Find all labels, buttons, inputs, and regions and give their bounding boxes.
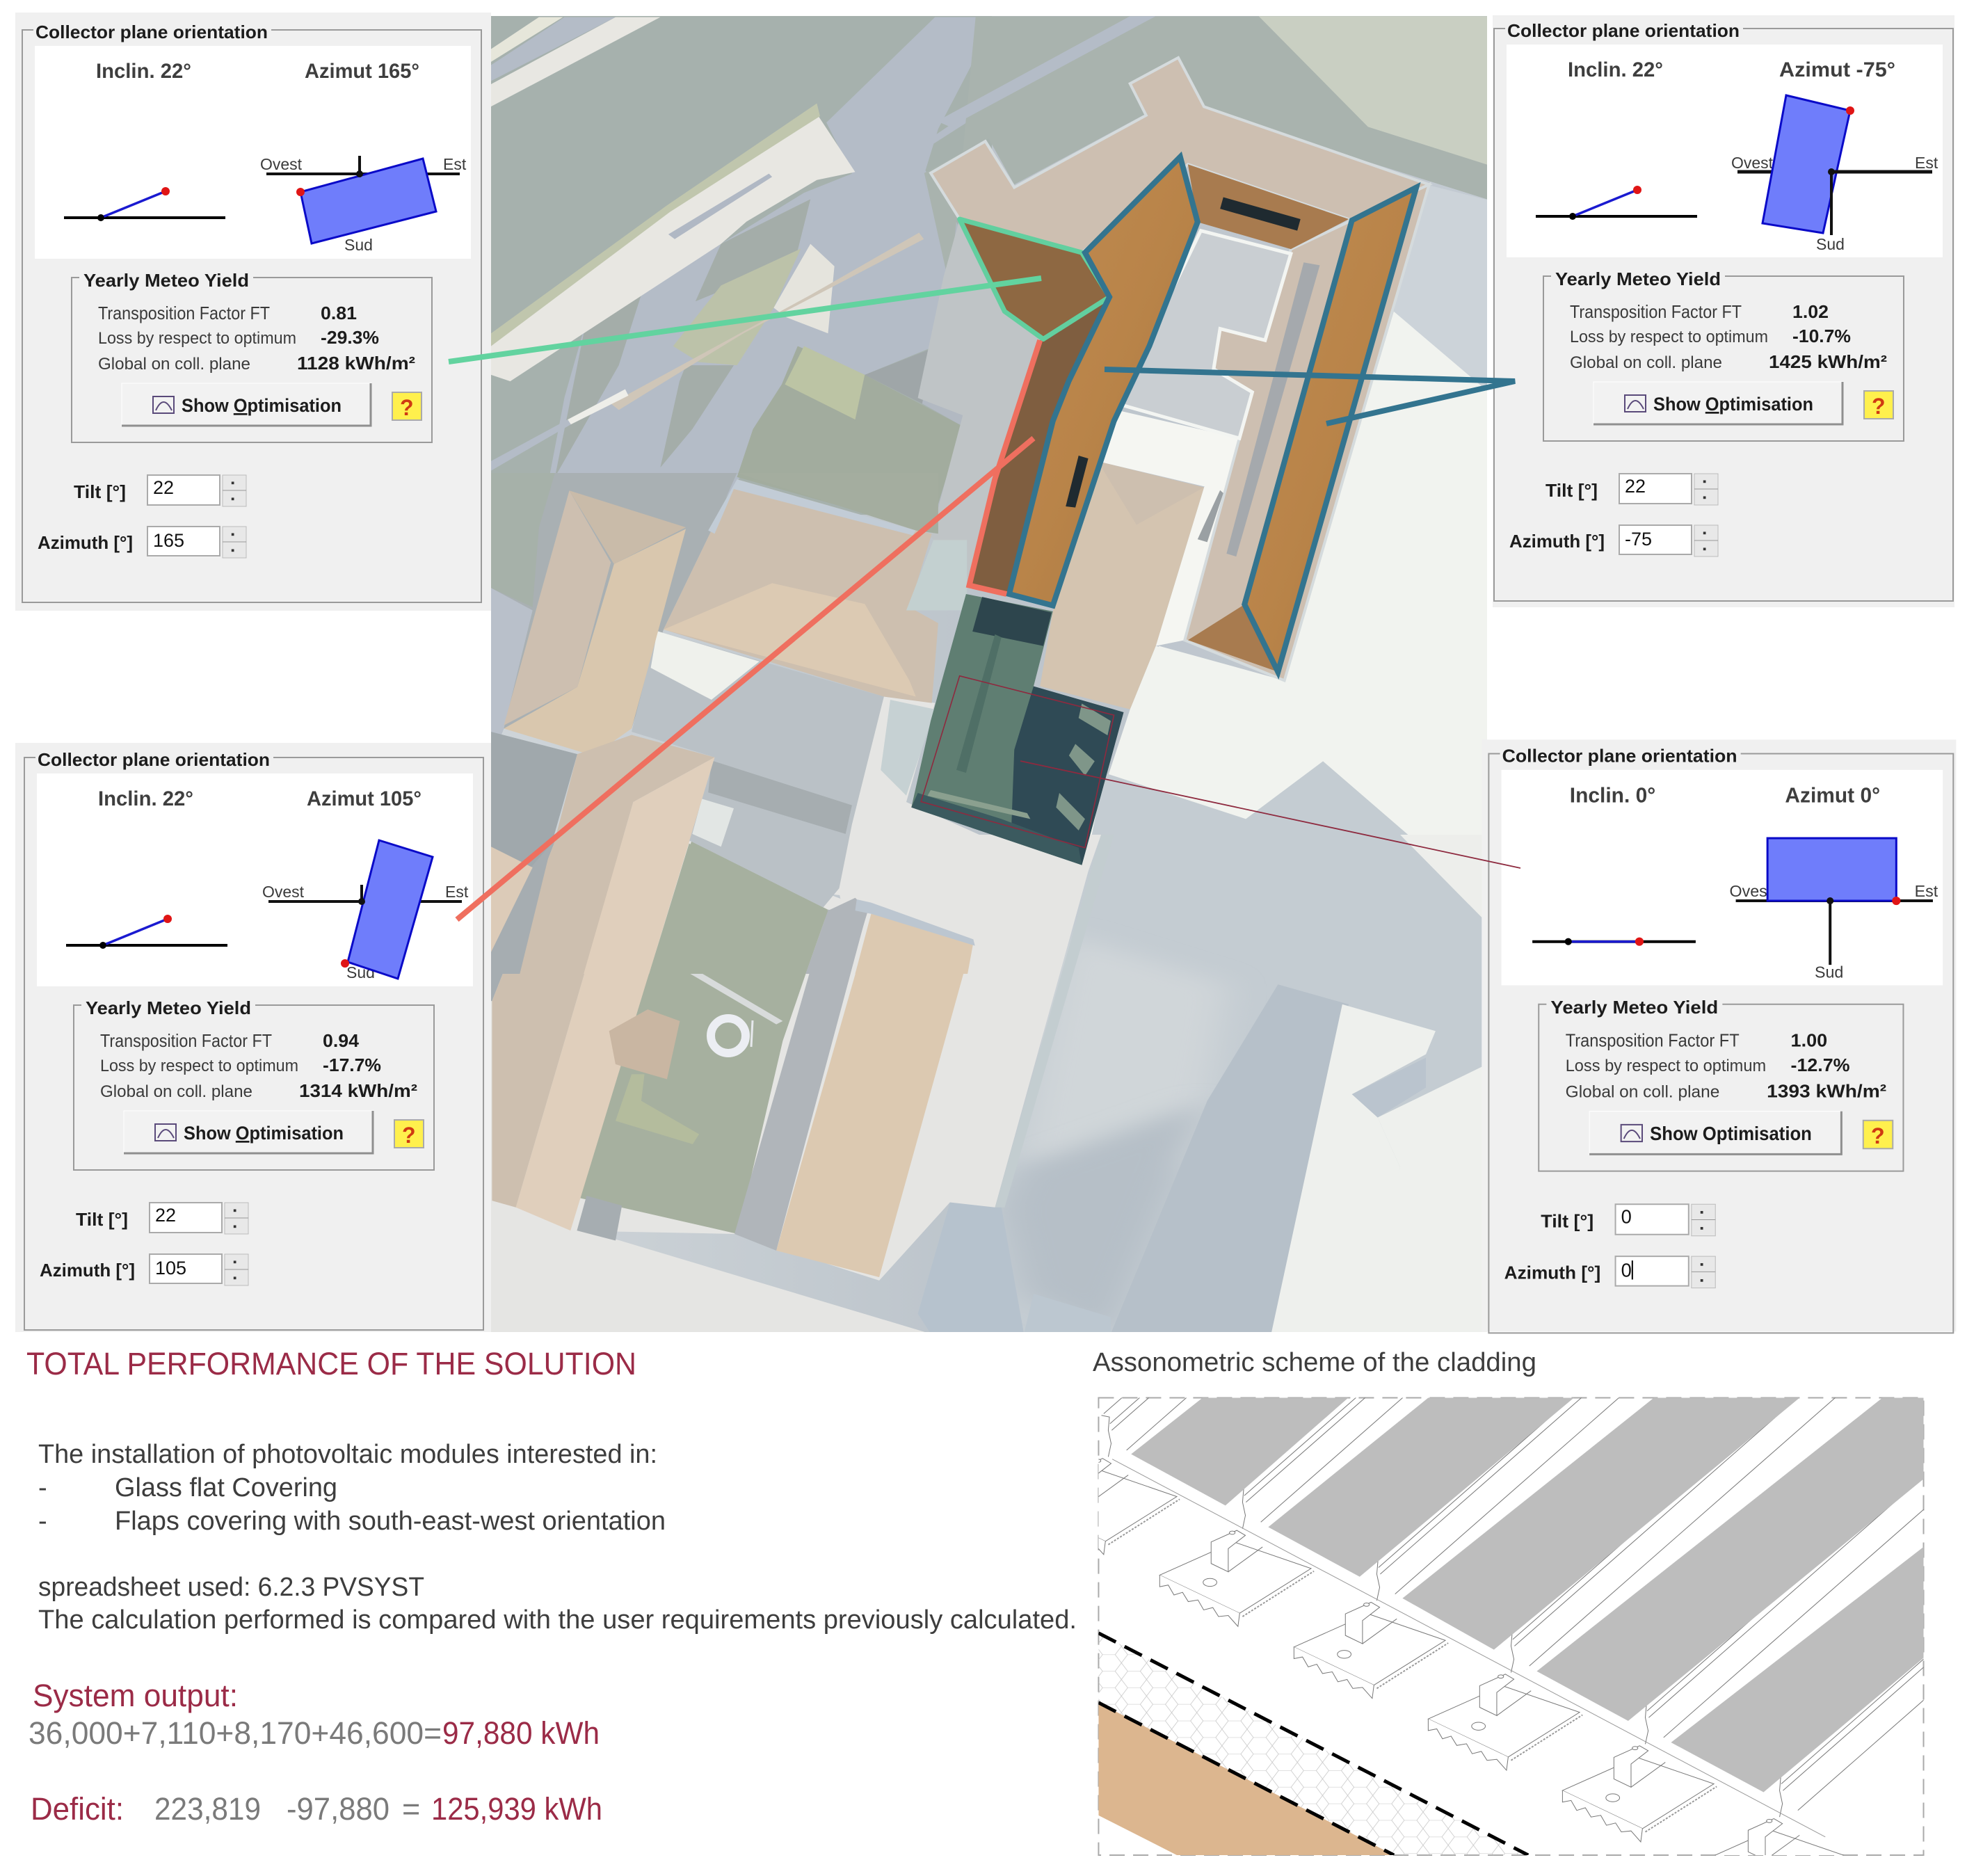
text block: deficit: = xyxy=(402,1791,420,1827)
panel: collector orientation 0 xyxy=(1482,739,1956,1333)
connector: red xyxy=(457,438,1034,920)
tilt input: 22 xyxy=(1625,476,1646,497)
red roof edge xyxy=(970,340,1040,594)
azimuth input: Azimuth [°] xyxy=(1509,531,1605,552)
tilt input: 0 xyxy=(1621,1206,1632,1228)
azimuth input: ▪ xyxy=(1700,1258,1703,1270)
text block: system output: 36,000+7,110+8,170+46,600= xyxy=(29,1715,442,1751)
tilt input xyxy=(74,475,246,506)
connector: thin dark red xyxy=(1020,761,1520,868)
azimuth diagram xyxy=(262,840,469,981)
axonometric cladding diagram xyxy=(1098,1397,1924,1856)
text block: installation description xyxy=(38,1440,1077,1635)
yearly meteo yield: 1.02 xyxy=(1792,301,1829,322)
connector: blue xyxy=(1105,369,1515,424)
text block: installation description: The calculation performed is compared with the user requirements previously calculated. xyxy=(38,1605,1077,1635)
yearly meteo yield: Yearly Meteo Yield xyxy=(86,997,251,1018)
yearly meteo yield: 0.81 xyxy=(321,303,357,323)
tilt input: ▪ xyxy=(1700,1223,1703,1235)
azimuth diagram: Est xyxy=(1915,154,1938,172)
azimuth input: Azimuth [°] xyxy=(40,1260,135,1281)
inclination label: Inclin. 22° xyxy=(96,60,191,83)
tilt input: 22 xyxy=(153,477,174,498)
heading: cladding scheme: Assonometric scheme of the cladding xyxy=(1093,1348,1536,1377)
azimuth label: Azimut 105° xyxy=(307,787,421,810)
connector: green xyxy=(449,278,1041,362)
azimuth label: Azimut 0° xyxy=(1785,784,1880,807)
text block: installation description: - xyxy=(38,1507,47,1536)
azimuth input xyxy=(38,527,246,558)
panel: green roof outline xyxy=(960,219,1109,339)
azimuth label: Azimut 165° xyxy=(305,60,419,83)
panel: collector orientation 165 xyxy=(15,13,491,611)
azimuth input: ▪ xyxy=(1703,543,1706,555)
yearly meteo yield: ? xyxy=(400,395,414,420)
yearly meteo yield: Transposition Factor FT xyxy=(1570,301,1742,322)
azimuth diagram: Sud xyxy=(1815,963,1843,981)
inclination label: Inclin. 0° xyxy=(1570,784,1655,807)
mounting supports xyxy=(1098,1398,1924,1855)
yearly meteo yield xyxy=(1539,997,1903,1171)
tilt input: Tilt [°] xyxy=(1546,480,1598,501)
azimuth input: Azimuth [°] xyxy=(38,532,133,553)
azimuth diagram: Ovest xyxy=(1731,154,1774,172)
text block: installation description: The installation of photovoltaic modules interested in: xyxy=(38,1440,657,1469)
heading: Collector plane orientation xyxy=(1507,20,1740,41)
yearly meteo yield: 1.00 xyxy=(1791,1030,1827,1051)
map: northwest streets and shadows xyxy=(491,14,992,515)
tilt diagram xyxy=(1536,186,1697,220)
yearly meteo yield: Yearly Meteo Yield xyxy=(83,270,249,291)
yearly meteo yield: ? xyxy=(1872,394,1886,419)
tilt input: ▪ xyxy=(233,1221,236,1233)
azimuth diagram: Ovest xyxy=(1729,882,1772,900)
text block: system output: 97,880 kWh xyxy=(442,1715,600,1751)
yearly meteo yield: Loss by respect to optimum xyxy=(1566,1057,1766,1075)
text block: installation description: spreadsheet used: 6.2.3 PVSYST xyxy=(38,1573,424,1602)
yearly meteo yield: 1425 kWh/m² xyxy=(1769,351,1887,372)
yearly meteo yield: ? xyxy=(402,1123,416,1148)
map: southern blocks xyxy=(487,835,1495,1333)
yearly meteo yield xyxy=(74,997,434,1170)
tilt input: ▪ xyxy=(1703,476,1706,488)
yearly meteo yield: ? xyxy=(1871,1123,1885,1148)
azimuth input xyxy=(1504,1256,1715,1288)
yearly meteo yield: Transposition Factor FT xyxy=(98,303,270,323)
text block: installation description: Glass flat Covering xyxy=(115,1473,337,1502)
yearly meteo yield: Global on coll. plane xyxy=(1566,1082,1719,1101)
azimuth input: 0 xyxy=(1621,1259,1632,1281)
yearly meteo yield: -17.7% xyxy=(323,1055,381,1075)
yearly meteo yield: Loss by respect to optimum xyxy=(100,1057,298,1075)
tilt input: ▪ xyxy=(1700,1206,1703,1218)
yearly meteo yield: Yearly Meteo Yield xyxy=(1550,997,1718,1018)
azimuth input: Azimuth [°] xyxy=(1504,1262,1600,1283)
text block: system output: System output: xyxy=(33,1678,238,1713)
tilt input: Tilt [°] xyxy=(1541,1211,1593,1232)
azimuth input: ▪ xyxy=(231,545,234,556)
photovoltaic panels xyxy=(1131,1398,1924,1792)
text block: installation description: Flaps covering with south-east-west orientation xyxy=(115,1507,666,1536)
tilt input xyxy=(1541,1204,1715,1236)
tilt diagram xyxy=(66,915,227,949)
panel: blue right roof outline xyxy=(1244,187,1416,672)
heading: Collector plane orientation xyxy=(1502,746,1737,767)
tilt diagram xyxy=(64,187,225,221)
glass flat covering xyxy=(911,594,1123,865)
yearly meteo yield: Global on coll. plane xyxy=(100,1082,252,1101)
azimuth label: Azimut -75° xyxy=(1779,58,1895,81)
tilt input: ▪ xyxy=(231,493,234,505)
yearly meteo yield xyxy=(1543,268,1904,441)
azimuth diagram xyxy=(260,155,467,254)
heading: Collector plane orientation xyxy=(38,749,270,770)
inclination label: Inclin. 22° xyxy=(98,787,193,810)
azimuth input xyxy=(40,1254,248,1285)
azimuth diagram: Sud xyxy=(346,963,375,981)
map: upper right ground xyxy=(918,16,1495,904)
panel: collector orientation -75 xyxy=(1493,15,1954,607)
text block: deficit xyxy=(31,1791,602,1827)
yearly meteo yield: Loss by respect to optimum xyxy=(98,329,296,348)
panel: blue left roof outline xyxy=(1009,157,1198,606)
azimuth input: ▪ xyxy=(233,1256,236,1268)
azimuth diagram xyxy=(1731,95,1938,253)
insulation layer xyxy=(1098,1633,1528,1855)
map: central blocks xyxy=(491,473,992,974)
map: U-shaped building and roof panels xyxy=(911,58,1429,865)
tilt input xyxy=(76,1203,248,1234)
text block: deficit: -97,880 xyxy=(287,1791,390,1827)
timber layer xyxy=(1098,1703,1394,1855)
tilt input: 22 xyxy=(155,1205,176,1226)
panel: collector orientation 105 xyxy=(15,743,491,1332)
text block: deficit: Deficit: xyxy=(31,1791,124,1827)
icon: helipad marking xyxy=(711,1018,753,1053)
yearly meteo yield: 1128 kWh/m² xyxy=(297,353,415,374)
yearly meteo yield: Show Optimisation xyxy=(184,1123,344,1144)
yearly meteo yield: -12.7% xyxy=(1791,1055,1850,1075)
azimuth input: ▪ xyxy=(233,1272,236,1284)
yearly meteo yield: Global on coll. plane xyxy=(98,355,250,374)
tilt input: ▪ xyxy=(233,1205,236,1217)
yearly meteo yield: 1393 kWh/m² xyxy=(1767,1080,1886,1101)
tilt input: Tilt [°] xyxy=(76,1209,128,1230)
yearly meteo yield: Transposition Factor FT xyxy=(100,1030,272,1051)
tilt input: Tilt [°] xyxy=(74,481,126,502)
yearly meteo yield: Yearly Meteo Yield xyxy=(1555,268,1721,289)
azimuth input: ▪ xyxy=(1700,1275,1703,1287)
azimuth diagram xyxy=(1729,838,1938,981)
tilt input xyxy=(1546,474,1718,505)
heading: total performance: TOTAL PERFORMANCE OF THE SOLUTION xyxy=(26,1346,636,1381)
glass area thin outline xyxy=(921,676,1114,848)
yearly meteo yield: Transposition Factor FT xyxy=(1566,1030,1740,1051)
azimuth diagram: Sud xyxy=(1816,235,1845,253)
heading: Collector plane orientation xyxy=(35,22,268,42)
text block: installation description: - xyxy=(38,1473,47,1502)
azimuth diagram: Est xyxy=(1915,882,1938,900)
azimuth diagram: Ovest xyxy=(262,883,305,901)
yearly meteo yield: Show Optimisation xyxy=(1653,394,1813,415)
azimuth input: 165 xyxy=(153,530,184,551)
yearly meteo yield: -10.7% xyxy=(1792,326,1851,346)
yearly meteo yield: Global on coll. plane xyxy=(1570,353,1722,372)
aerial map xyxy=(487,14,1495,1333)
tilt input: ▪ xyxy=(1703,492,1706,504)
text block: deficit: 125,939 kWh xyxy=(431,1791,602,1827)
azimuth input: ▪ xyxy=(1703,527,1706,539)
yearly meteo yield: Show Optimisation xyxy=(1650,1123,1812,1144)
azimuth diagram: Est xyxy=(443,155,467,173)
inclination label: Inclin. 22° xyxy=(1568,58,1663,81)
azimuth input: ▪ xyxy=(231,529,234,540)
yearly meteo yield: -29.3% xyxy=(321,327,379,348)
yearly meteo yield: 1314 kWh/m² xyxy=(299,1080,417,1101)
azimuth input: -75 xyxy=(1625,529,1652,550)
yearly meteo yield xyxy=(72,270,432,442)
panel: south-facing brown roof xyxy=(970,300,1107,594)
yearly meteo yield: 0.94 xyxy=(323,1030,360,1051)
azimuth input: 105 xyxy=(155,1258,186,1278)
tilt input: ▪ xyxy=(231,477,234,489)
tilt diagram xyxy=(1532,938,1696,946)
yearly meteo yield: Loss by respect to optimum xyxy=(1570,328,1768,346)
yearly meteo yield: Show Optimisation xyxy=(182,395,342,416)
azimuth diagram: Est xyxy=(445,883,469,901)
text block: deficit: 223,819 xyxy=(154,1791,261,1827)
azimuth diagram: Sud xyxy=(344,236,373,254)
azimuth diagram: Ovest xyxy=(260,155,303,173)
text block: system output xyxy=(29,1678,600,1751)
azimuth input xyxy=(1509,525,1718,556)
